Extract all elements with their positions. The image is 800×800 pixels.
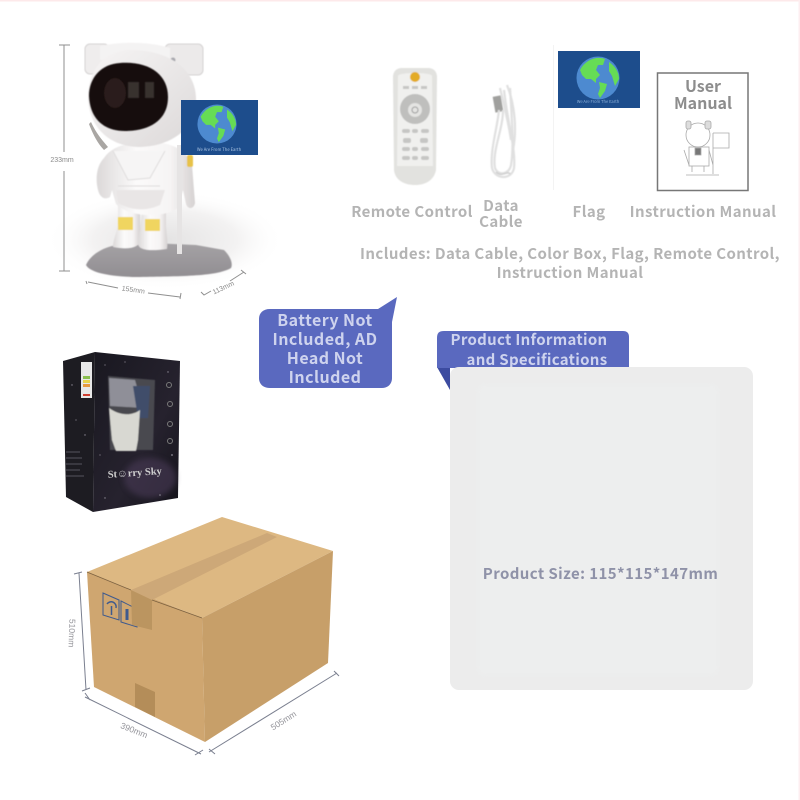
product photo: shipping carton <box>67 517 339 755</box>
product info ribbon heading: and Specifications <box>467 349 607 370</box>
labels row <box>351 195 776 232</box>
box title: St☺rry Sky <box>107 466 163 481</box>
label: instruction manual: Instruction Manual <box>630 201 776 222</box>
icon: flag pole <box>177 145 182 254</box>
dimension: width 155mm: 155mm <box>121 285 145 296</box>
callout: battery note <box>259 297 397 388</box>
accessory: user manual: Manual <box>674 90 732 114</box>
product info ribbon heading: Product Information <box>451 329 607 350</box>
icon: astronaut legs <box>113 200 167 250</box>
icon: astronaut torso and arms <box>97 142 195 215</box>
dimension: height 233mm: 233mm <box>50 157 74 164</box>
label: data cable: Cable <box>479 211 523 232</box>
accessory: flag: We Are From The Earth <box>577 99 620 105</box>
specifications panel <box>450 367 753 690</box>
includes text: Includes: Data Cable, Color Box, Flag, Remote Control, <box>360 243 780 264</box>
packing tape <box>131 533 277 600</box>
accessory: remote control <box>393 68 437 185</box>
label: data cable: Data <box>483 195 519 216</box>
callout: battery note: Battery Not <box>277 307 373 331</box>
includes text: Instruction Manual <box>497 262 643 283</box>
label: flag: Flag <box>573 201 605 222</box>
flap seam <box>87 572 202 618</box>
dimension: 390mm <box>85 693 203 755</box>
icon: visor <box>89 63 168 131</box>
dimension: width 155mm <box>86 281 181 299</box>
carton handling icons <box>103 593 137 627</box>
dimension: depth 113mm: 113mm <box>212 280 236 296</box>
dimension: 510mm <box>67 572 90 691</box>
box side text lines <box>66 452 84 476</box>
manual title: User <box>685 73 721 97</box>
accessory: flag <box>553 45 640 190</box>
label: remote control: Remote Control <box>351 201 473 222</box>
star specks <box>71 361 173 499</box>
icon: flag: We Are From The Earth <box>197 147 242 153</box>
dimension: 505mm <box>209 671 339 754</box>
dimension: depth 113mm <box>201 270 246 296</box>
label: data cable <box>479 195 523 232</box>
icon: energy label <box>81 362 92 398</box>
box window with astronaut <box>108 376 155 451</box>
icon: rock base <box>86 243 232 277</box>
icon: strap <box>89 122 108 150</box>
box side icons <box>166 382 172 444</box>
product info ribbon heading <box>437 329 629 390</box>
accessory: data cable <box>492 85 515 177</box>
product size text: Product Size: 115*115*147mm <box>483 563 718 584</box>
icon: flag <box>181 100 258 155</box>
dimension: height 233mm <box>50 45 74 271</box>
dimension: 390mm: 390mm <box>119 720 149 740</box>
callout: battery note: Head Not <box>287 345 363 369</box>
includes text <box>360 243 780 283</box>
product photo: astronaut projector with dimensions <box>45 43 285 299</box>
dimension: 510mm: 510mm <box>67 619 77 647</box>
icon: helmet shell <box>88 50 196 147</box>
accessory: user manual <box>658 73 748 190</box>
callout: battery note: Included, AD <box>272 326 378 350</box>
callout: battery note: Included <box>289 364 361 388</box>
product photo: colour box <box>63 352 180 512</box>
icon: astronaut line drawing <box>684 121 729 175</box>
icon: helmet ear pieces <box>85 43 203 75</box>
dimension: 505mm: 505mm <box>269 709 298 732</box>
